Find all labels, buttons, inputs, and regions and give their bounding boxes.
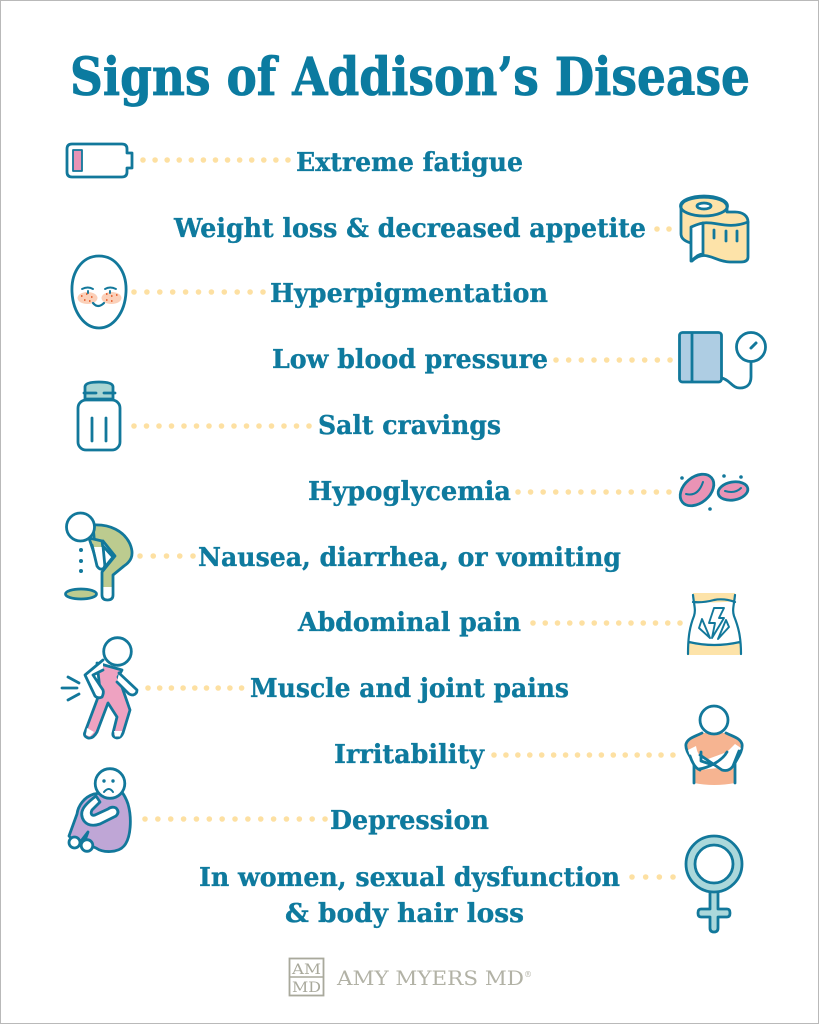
label: extreme fatigue: Extreme fatigue <box>296 148 523 178</box>
row: weight loss <box>173 196 748 262</box>
row: sexual dysfunction <box>199 836 742 932</box>
icon: salt shaker <box>78 382 120 450</box>
row: hypoglycemia <box>308 468 749 512</box>
row: extreme fatigue <box>67 144 523 178</box>
icon: sitting person <box>69 769 130 852</box>
label: abdominal pain: Abdominal pain <box>297 608 521 638</box>
icon: blood pressure cuff <box>680 332 766 388</box>
label: depression: Depression <box>330 806 489 836</box>
icon: battery <box>67 144 132 177</box>
icon: female symbol <box>686 836 742 932</box>
label: muscle and joint pains: Muscle and joint pains <box>250 674 569 704</box>
row: low blood pressure <box>272 332 766 388</box>
row: nausea <box>66 513 621 600</box>
icon: abdomen <box>688 593 741 655</box>
logo: Amy Myers MD <box>289 958 532 996</box>
row: hyperpigmentation <box>72 256 548 328</box>
icon: person vomiting <box>66 513 132 600</box>
label: sexual dysfunction: In women, sexual dysfunction <box>199 863 620 893</box>
icon: person with hip pain <box>62 638 137 738</box>
icon: blood cells <box>674 468 749 512</box>
label: salt cravings: Salt cravings <box>318 411 501 441</box>
row: salt cravings <box>78 382 501 450</box>
icon: face <box>72 256 126 328</box>
label: hyperpigmentation: Hyperpigmentation <box>270 279 548 309</box>
label: low blood pressure: Low blood pressure <box>272 345 548 375</box>
label: body hair loss: & body hair loss <box>285 899 524 929</box>
logo mark: AM <box>291 962 321 978</box>
row: depression <box>69 769 489 852</box>
label: nausea: Nausea, diarrhea, or vomiting <box>198 543 621 573</box>
label: hypoglycemia: Hypoglycemia <box>308 477 511 507</box>
wordmark: AMY MYERS MD <box>336 966 524 990</box>
icon: person arms crossed <box>686 706 742 785</box>
logo: Amy Myers MD: ® <box>524 970 532 979</box>
label: weight loss: Weight loss & decreased appetite <box>173 214 646 244</box>
logo mark: MD <box>292 980 321 996</box>
row: abdominal pain <box>297 593 741 655</box>
row: irritability <box>334 706 742 785</box>
icon: measuring tape <box>680 196 748 262</box>
row: muscle and joint pains <box>62 638 569 738</box>
logo mark <box>289 958 324 996</box>
label: irritability: Irritability <box>334 740 485 770</box>
